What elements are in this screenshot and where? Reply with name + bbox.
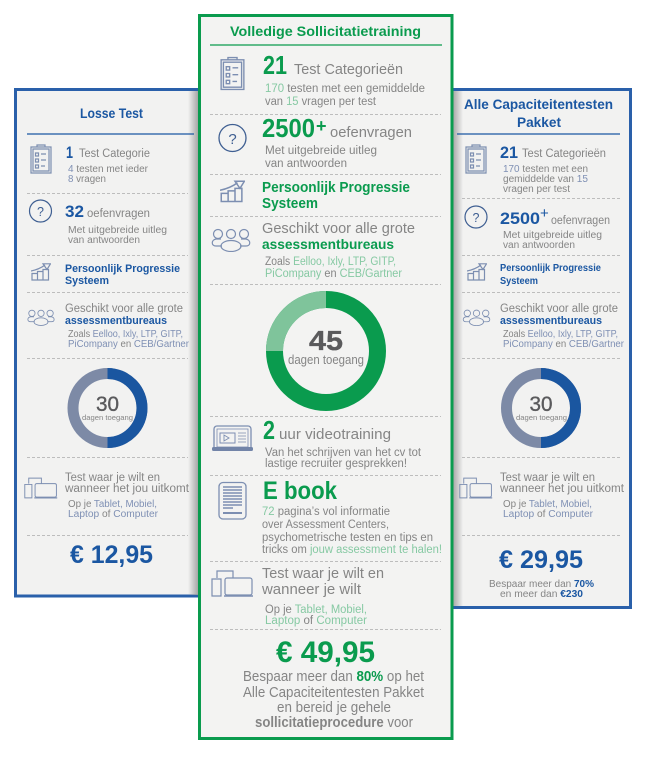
test category text: gemiddelde van 15 xyxy=(503,174,588,185)
test category text xyxy=(263,50,425,108)
video training text: 2 xyxy=(263,415,275,445)
devices text: Op je Tablet, Mobiel, xyxy=(68,499,157,510)
practice questions text xyxy=(262,113,412,170)
e-book text: over Assessment Centers, xyxy=(262,519,389,531)
devices text: wanneer het jou uitkomt xyxy=(499,483,625,495)
test category text xyxy=(66,144,150,185)
icon: e-book reader xyxy=(219,482,246,519)
e-book text xyxy=(262,477,442,556)
icon: progress chart xyxy=(467,264,486,280)
heading: Volledige Sollicitatietraining: Volledige Sollicitatietraining xyxy=(230,24,421,39)
donut: 30 days: dagen toegang xyxy=(516,413,567,422)
assessment bureaus text: assessmentbureaus xyxy=(65,315,167,327)
icon: question mark: ? xyxy=(473,211,480,225)
e-book text: tricks om jouw assessment te halen! xyxy=(262,544,442,556)
assessment bureaus text xyxy=(262,220,415,280)
practice questions text: oefenvragen xyxy=(551,215,610,227)
savings text: Bespaar meer dan 80% op het xyxy=(243,669,424,685)
practice questions text: 2500 xyxy=(500,210,540,228)
progress system text xyxy=(500,263,601,287)
e-book text: 72 pagina’s vol informatie xyxy=(262,506,390,518)
assessment bureaus text: PiCompany en CEB/Gartner xyxy=(265,268,402,280)
practice questions text: Met uitgebreide uitleg xyxy=(265,145,377,157)
test category text: vragen per test xyxy=(503,184,570,195)
heading: Losse Test: Losse Test xyxy=(80,106,143,121)
donut: 30 days: 30 xyxy=(530,393,552,416)
devices text: Op je Tablet, Mobiel, xyxy=(265,604,367,616)
assessment bureaus text: PiCompany en CEB/Gartner xyxy=(503,339,625,350)
donut: 45 days xyxy=(274,300,378,402)
devices text xyxy=(261,565,384,627)
icon: clipboard xyxy=(31,145,51,173)
icon: question mark xyxy=(30,200,52,222)
test category text xyxy=(500,144,606,195)
devices text: Laptop of Computer xyxy=(503,509,594,520)
progress system text: Systeem xyxy=(65,275,109,287)
icon: people xyxy=(28,310,54,326)
savings text: sollicitatieprocedure voor xyxy=(255,715,413,731)
price: 29,95: en meer dan €230 xyxy=(500,589,583,600)
savings text xyxy=(243,669,424,731)
devices text: Test waar je wilt en xyxy=(65,472,160,484)
donut: 45 days: 45 xyxy=(309,325,343,356)
assessment bureaus text: Zoals Eelloo, Ixly, LTP, GITP, xyxy=(68,329,183,340)
test category text: 170 testen met een gemiddelde xyxy=(265,83,425,95)
test category text: 4 testen met ieder xyxy=(68,164,149,175)
savings text: Alle Capaciteitentesten Pakket xyxy=(243,685,424,701)
icon: question mark xyxy=(465,206,487,228)
practice questions text xyxy=(500,205,610,251)
practice questions text: van antwoorden xyxy=(68,235,140,246)
devices text: Test waar je wilt en xyxy=(500,472,595,484)
heading: Alle Capaciteitentesten Pakket: Alle Capaciteitentesten xyxy=(464,97,613,112)
practice questions text: oefenvragen xyxy=(330,124,412,141)
icon: clipboard xyxy=(466,145,486,173)
price: 29,95 xyxy=(489,546,594,600)
e-book text: psychometrische testen en tips en xyxy=(262,532,433,544)
test category text: 1 xyxy=(66,144,73,162)
devices text: wanneer je wilt xyxy=(261,581,362,598)
donut: 30 days: dagen toegang xyxy=(82,413,133,422)
progress system text xyxy=(262,180,410,212)
icon: video laptop xyxy=(212,426,253,451)
icon: progress chart xyxy=(31,264,50,280)
practice questions text: Met uitgebreide uitleg xyxy=(68,225,167,236)
donut: 30 days xyxy=(73,374,142,442)
progress system text: Persoonlijk Progressie xyxy=(65,263,180,275)
panel: Alle Capaciteitentesten Pakket xyxy=(445,90,630,608)
icon: question mark: ? xyxy=(37,205,44,219)
video training text: lastige recruiter gesprekken! xyxy=(265,458,407,470)
assessment bureaus text: assessmentbureaus xyxy=(262,237,394,252)
devices text: Laptop of Computer xyxy=(265,615,367,627)
icon: devices xyxy=(460,478,492,498)
price: 29,95: € 29,95 xyxy=(499,546,583,574)
test category text: 8 vragen xyxy=(68,174,106,185)
assessment bureaus text: Geschikt voor alle grote xyxy=(500,303,618,315)
test category text: Test Categorie xyxy=(79,148,150,160)
practice questions text: van antwoorden xyxy=(503,240,575,251)
video training text: uur videotraining xyxy=(279,426,391,443)
donut: 45 days: dagen toegang xyxy=(288,353,364,367)
icon: devices xyxy=(212,571,253,596)
savings text: en bereid je gehele xyxy=(277,700,391,716)
progress system text xyxy=(65,263,180,287)
assessment bureaus text xyxy=(65,303,190,350)
devices text: wanneer het jou uitkomt xyxy=(64,483,190,495)
price: 12,95: € 12,95 xyxy=(70,541,153,569)
practice questions text: oefenvragen xyxy=(87,208,150,220)
icon: question mark xyxy=(219,124,246,152)
test category text: 21 xyxy=(263,50,287,80)
heading: Alle Capaciteitentesten Pakket: Pakket xyxy=(517,115,561,130)
devices text xyxy=(499,472,625,520)
test category text: 170 testen met een xyxy=(503,164,588,175)
e-book text: E book xyxy=(263,477,337,505)
video training text xyxy=(263,415,422,470)
practice questions text: 2500 xyxy=(262,113,315,143)
assessment bureaus text xyxy=(500,303,625,350)
icon: progress chart xyxy=(220,181,244,202)
icon: people xyxy=(463,310,490,326)
practice questions text: + xyxy=(540,205,549,222)
devices text: Laptop of Computer xyxy=(68,509,159,520)
icon: people xyxy=(212,230,250,252)
practice questions text: 32 xyxy=(65,203,84,221)
panel: Volledige Sollicitatietraining xyxy=(200,16,452,738)
heading: Alle Capaciteitentesten Pakket xyxy=(464,97,613,130)
progress system text: Systeem xyxy=(500,276,538,287)
assessment bureaus text: assessmentbureaus xyxy=(500,315,602,327)
price: 29,95: Bespaar meer dan 70% xyxy=(489,579,594,590)
practice questions text: + xyxy=(316,116,327,136)
donut: 30 days: 30 xyxy=(96,393,119,416)
icon: devices xyxy=(25,478,57,498)
devices text: Op je Tablet, Mobiel, xyxy=(503,499,592,510)
devices text xyxy=(64,472,190,520)
test category text: 21 xyxy=(500,144,518,162)
assessment bureaus text: Geschikt voor alle grote xyxy=(262,220,415,237)
video training text: Van het schrijven van het cv tot xyxy=(265,447,422,459)
test category text: van 15 vragen per test xyxy=(265,96,377,108)
progress system text: Persoonlijk Progressie xyxy=(262,180,410,196)
practice questions text: van antwoorden xyxy=(265,158,347,170)
assessment bureaus text: Zoals Eelloo, Ixly, LTP, GITP, xyxy=(265,256,396,268)
panel: Losse Test xyxy=(16,90,206,596)
price: 49,95: € 49,95 xyxy=(276,636,375,669)
assessment bureaus text: PiCompany en CEB/Gartner xyxy=(68,339,190,350)
test category text: Test Categorieën xyxy=(294,61,403,78)
test category text: Test Categorieën xyxy=(522,148,606,160)
icon: question mark: ? xyxy=(228,131,237,148)
practice questions text xyxy=(65,203,167,246)
assessment bureaus text: Zoals Eelloo, Ixly, LTP, GITP, xyxy=(503,329,618,340)
icon: clipboard xyxy=(221,58,244,89)
progress system text: Systeem xyxy=(262,196,318,212)
donut: 30 days xyxy=(506,374,576,442)
assessment bureaus text: Geschikt voor alle grote xyxy=(65,303,183,315)
practice questions text: Met uitgebreide uitleg xyxy=(503,230,602,241)
devices text: Test waar je wilt en xyxy=(262,565,384,582)
progress system text: Persoonlijk Progressie xyxy=(500,263,601,274)
